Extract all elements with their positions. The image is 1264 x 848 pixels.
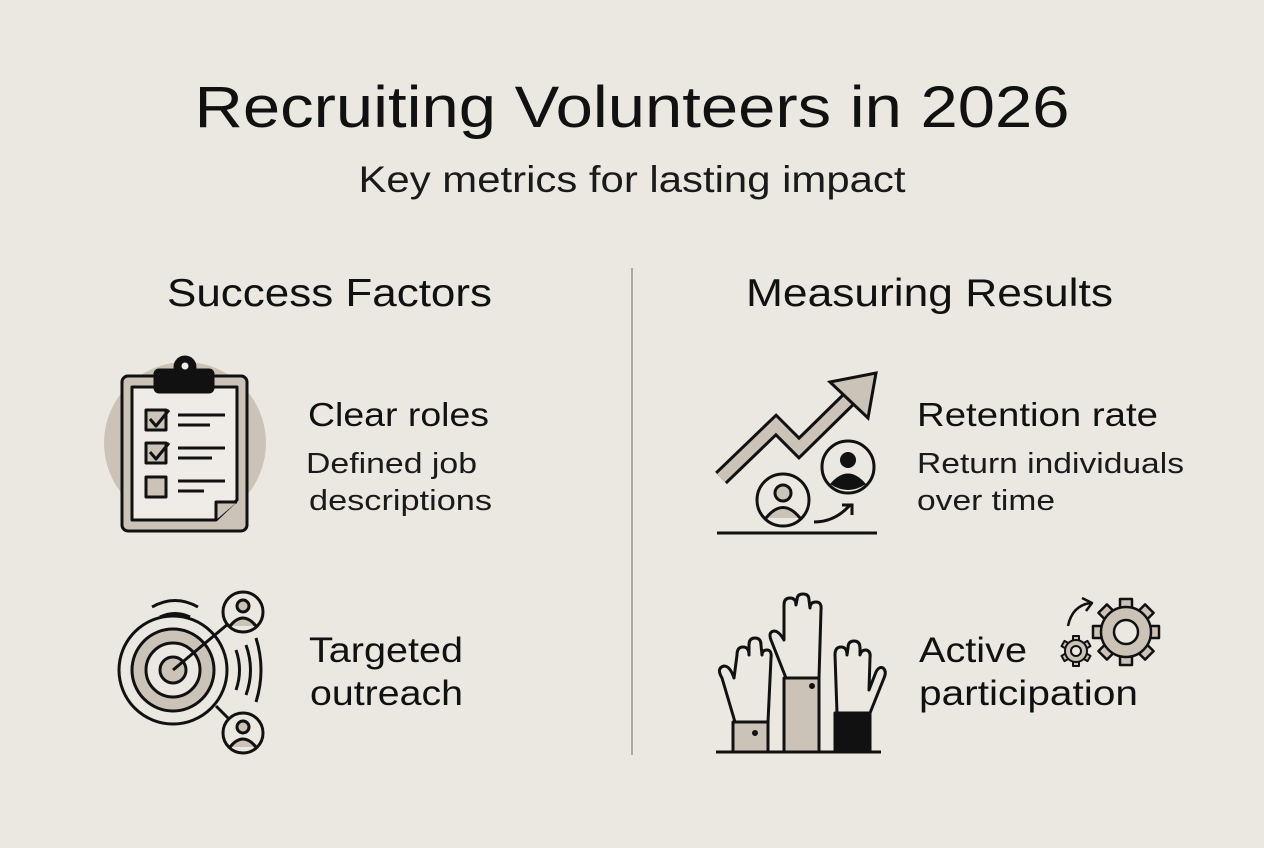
text: Retention rate: over time — [917, 485, 1055, 517]
icon: clipboard — [104, 357, 266, 531]
text: Clear roles: Clear roles — [308, 396, 489, 433]
heading: Measuring Results: Measuring Results — [746, 272, 1113, 315]
text: Targeted outreach: Targeted — [309, 631, 463, 670]
text: Targeted outreach — [309, 631, 463, 713]
icon: gears — [1062, 598, 1159, 666]
text: Clear roles: Defined job — [306, 448, 477, 480]
heading: Success Factors: Success Factors — [167, 272, 492, 315]
text: Active participation: participation — [919, 674, 1138, 713]
text: Active participation — [919, 631, 1138, 713]
text: Retention rate: Return individuals — [917, 448, 1184, 480]
icon: raised hands — [716, 594, 885, 752]
text: Clear roles: descriptions — [309, 485, 492, 517]
subtitle: Key metrics for lasting impact — [358, 159, 906, 200]
text: Targeted outreach: outreach — [310, 674, 463, 713]
text: Retention rate — [917, 396, 1184, 517]
title: Recruiting Volunteers in 2026 — [194, 75, 1070, 140]
icon: growth chart with people — [717, 373, 877, 533]
text: Clear roles — [306, 396, 492, 517]
text: Active participation: Active — [919, 631, 1027, 670]
icon: target — [119, 592, 263, 753]
text: Retention rate: Retention rate — [917, 396, 1158, 433]
